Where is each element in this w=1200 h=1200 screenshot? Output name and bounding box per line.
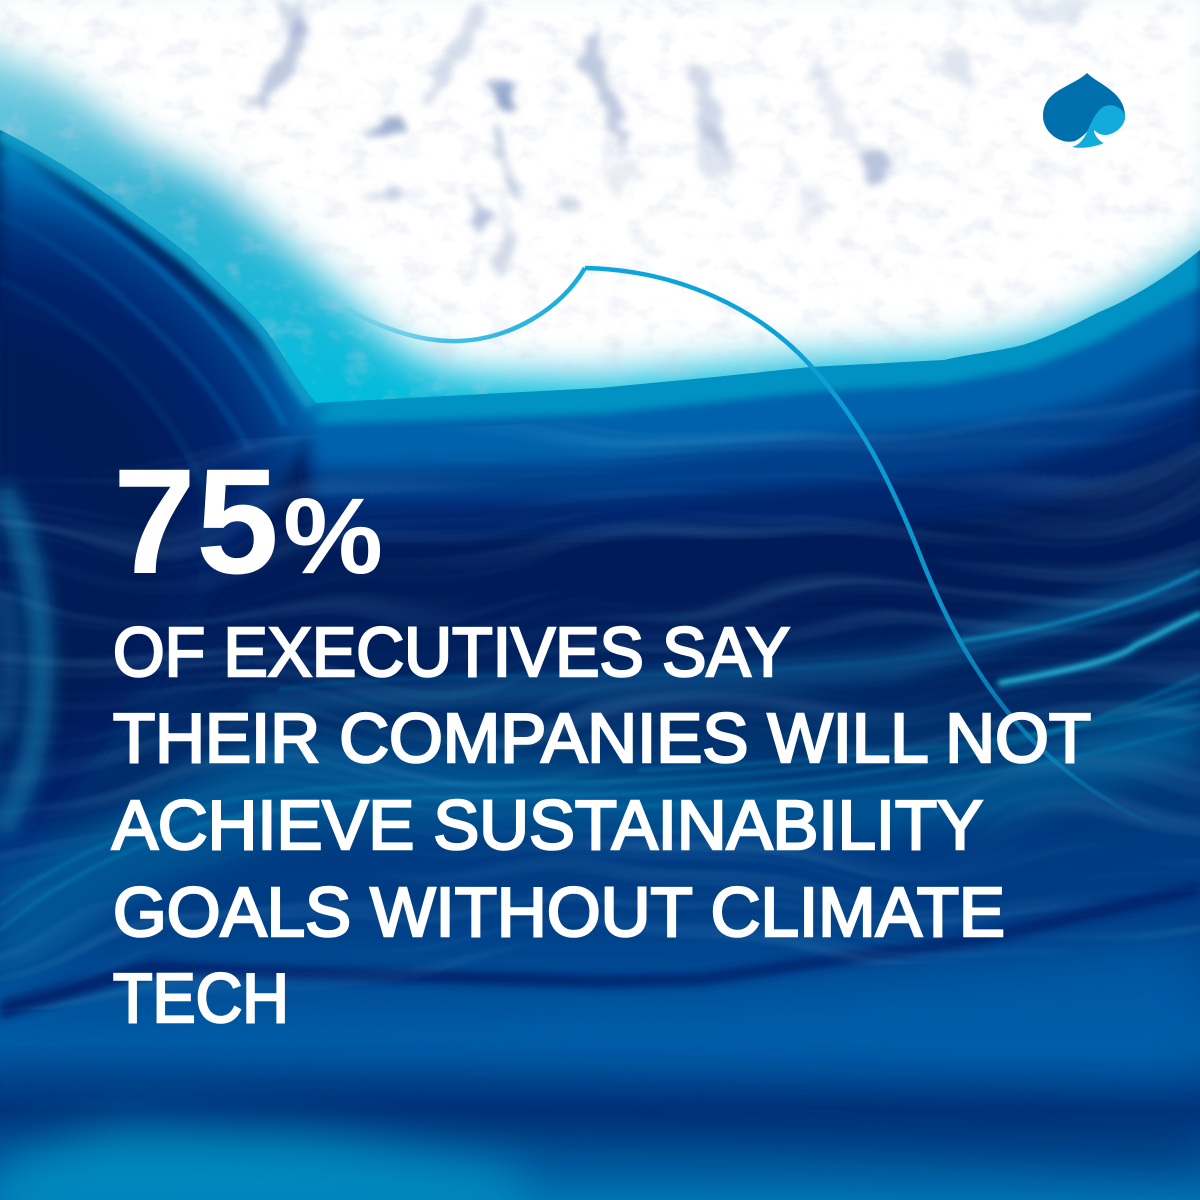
big statistic: 75% (113, 437, 383, 605)
statement text: TECH (113, 959, 289, 1037)
icon: Capgemini spade logo (1043, 73, 1125, 148)
statement text: ACHIEVE SUSTAINABILITY (112, 786, 983, 864)
statement text: GOALS WITHOUT CLIMATE (113, 873, 1005, 951)
big statistic: 75%: 75 (113, 437, 279, 605)
statement text: OF EXECUTIVES SAY (113, 613, 790, 691)
decorative curved blue line (335, 268, 1155, 826)
statement text: THEIR COMPANIES WILL NOT (113, 699, 1091, 777)
statement text (112, 613, 1091, 1037)
big statistic: 75%: % (283, 475, 383, 596)
